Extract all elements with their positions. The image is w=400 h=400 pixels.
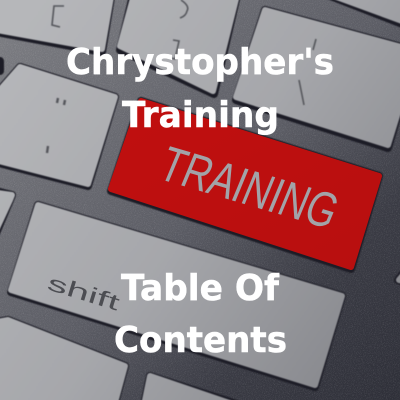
key label: TRAINING: TRAINING (152, 136, 347, 239)
red training key (111, 101, 379, 267)
key label: shift: shift (45, 270, 123, 315)
heading: Table Of Contents: Contents (114, 320, 287, 361)
title: Chrystopher's Training (66, 42, 334, 136)
heading: Table Of Contents (114, 268, 287, 361)
title: Chrystopher's Training: Training (122, 95, 279, 136)
heading: Table Of Contents: Table Of (121, 268, 279, 309)
key legends (47, 0, 316, 153)
title: Chrystopher's Training: Chrystopher's (66, 42, 334, 83)
